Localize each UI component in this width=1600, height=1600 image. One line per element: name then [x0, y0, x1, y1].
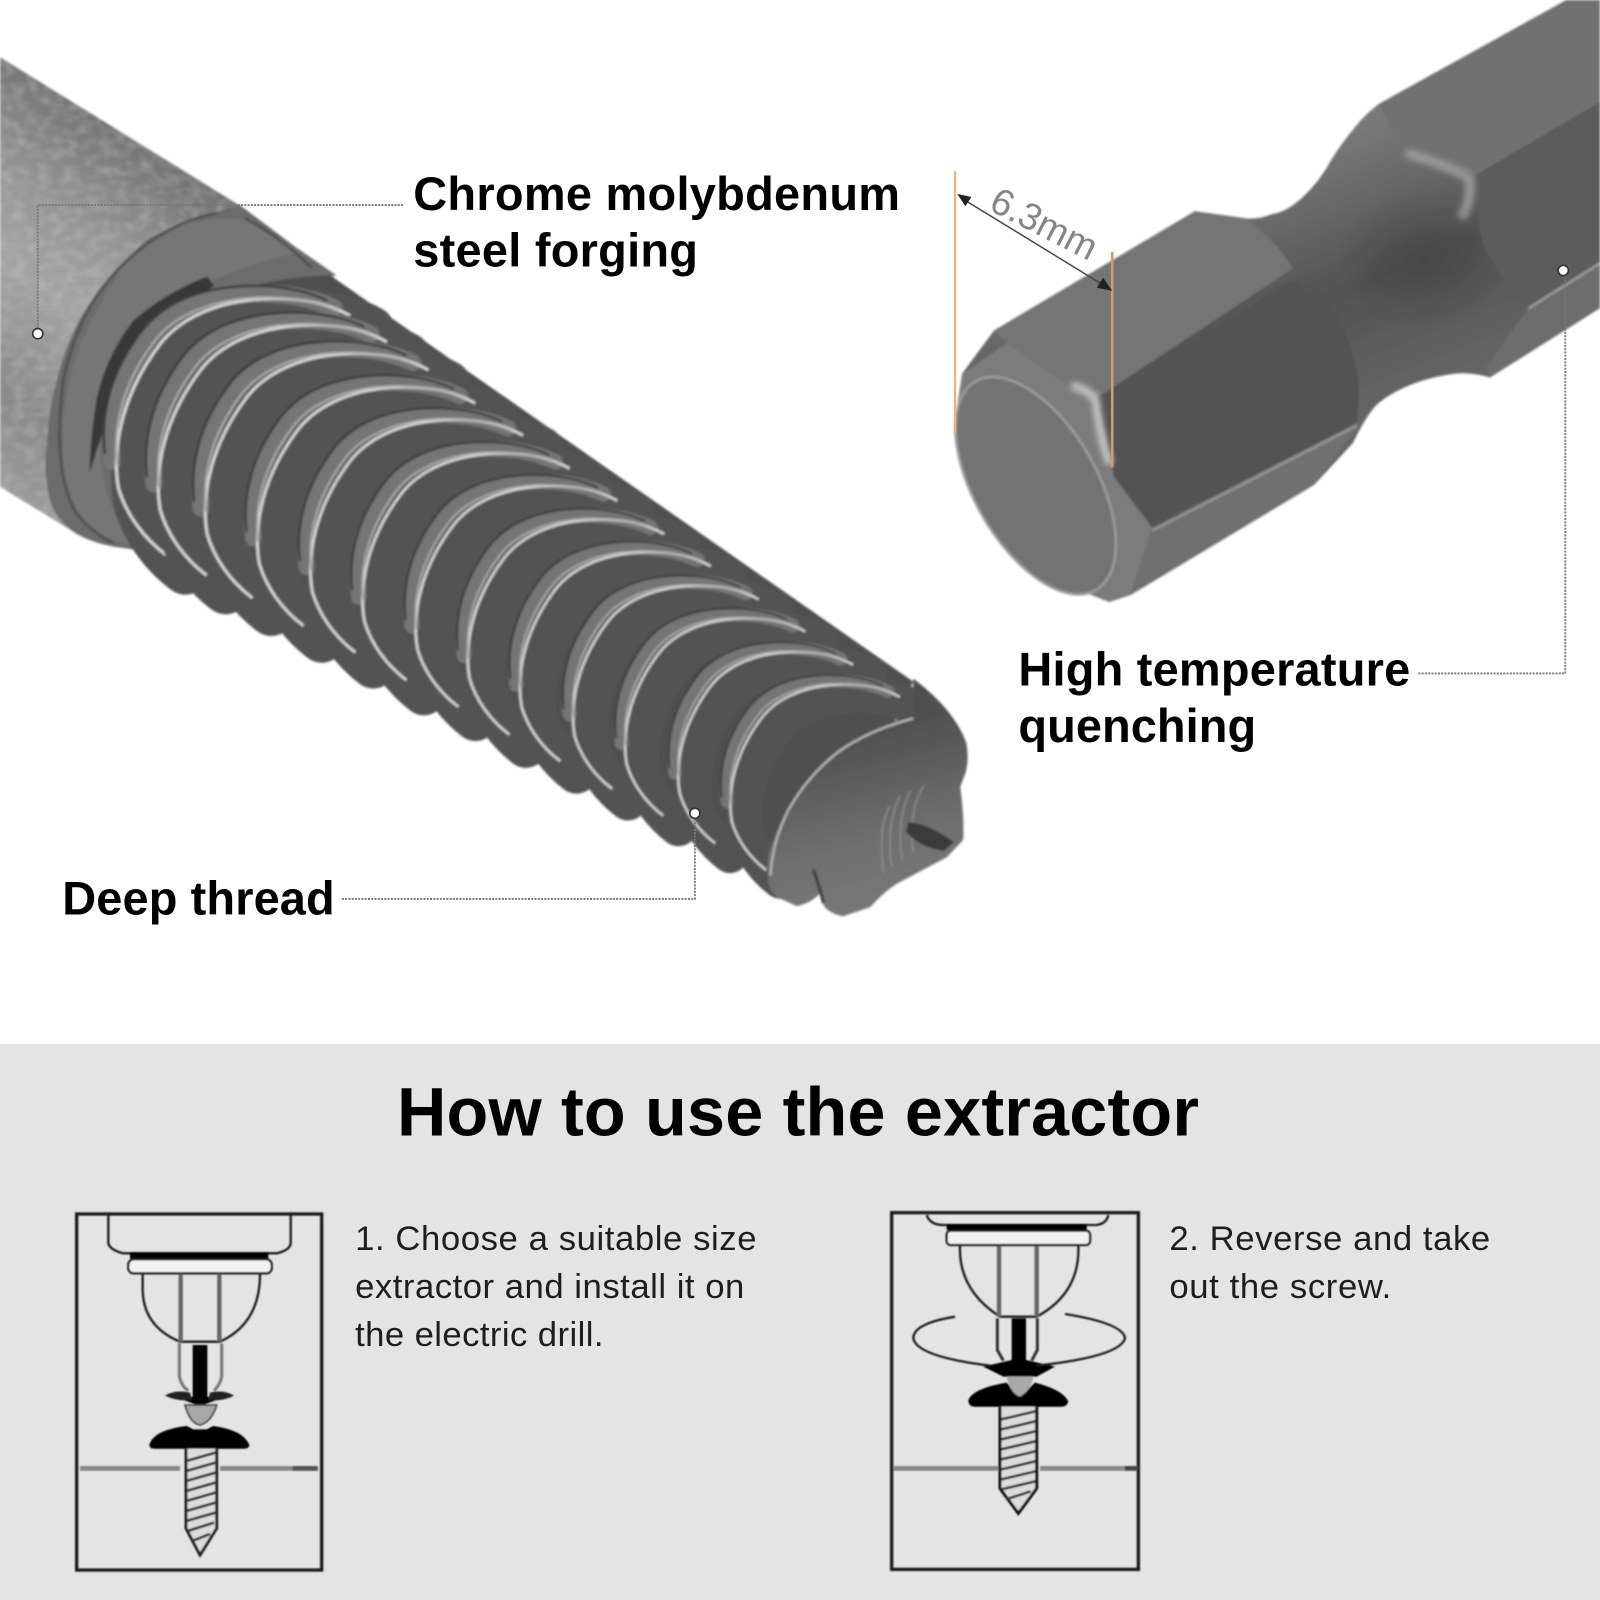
front hex side face: [1097, 281, 1359, 528]
text: step 1: extractor and install it on: [355, 1268, 745, 1306]
shank silhouette and neck: [956, 0, 1600, 602]
callout: chrome molybdenum: Chrome molybdenum: [413, 168, 900, 220]
rear hex top face: [1379, 0, 1600, 174]
callout: chrome molybdenum: [33, 168, 900, 339]
text: step 2: 2. Reverse and take: [1169, 1220, 1491, 1258]
text: step 1: the electric drill.: [355, 1316, 604, 1354]
callout: high temperature quenching: High temperature: [1018, 644, 1410, 696]
text: step 2: out the screw.: [1169, 1268, 1392, 1306]
callout: high temperature quenching: quenching: [1018, 700, 1256, 752]
rear hex side face: [1476, 102, 1600, 308]
thread turns: [42, 221, 914, 882]
threaded body base: [45, 205, 913, 888]
dimension: 6.3mm: [955, 171, 1112, 467]
neck shadow: [1337, 189, 1510, 332]
collar: [45, 205, 337, 551]
illustration: hex shank: [922, 0, 1600, 621]
text: step 1: [355, 1220, 757, 1354]
front hex lower face: [1109, 428, 1357, 602]
bit end chamfer: [956, 343, 1152, 602]
chamfer highlight: [1071, 386, 1110, 464]
callout: deep thread: [62, 808, 700, 924]
icon: step 2 drill with rotation: [892, 1213, 1138, 1569]
panel: how to use: [0, 1044, 1600, 1600]
callout: chrome molybdenum: steel forging: [413, 224, 698, 276]
illustration: threaded extractor bit: [0, 57, 968, 916]
neck highlight: [1406, 153, 1470, 218]
text: step 2: [1169, 1220, 1491, 1306]
text: step 1: 1. Choose a suitable size: [355, 1220, 757, 1258]
bit end face: [922, 351, 1149, 621]
steel shaft: [0, 57, 294, 547]
rear hex lower face: [1486, 263, 1600, 378]
heading: How to use the extractor: [397, 1075, 1199, 1151]
dimension: 6.3mm: 6.3mm: [984, 179, 1105, 268]
icon: step 1 drill: [77, 1214, 322, 1570]
collar slot: [90, 277, 214, 473]
front hex top face: [994, 211, 1293, 398]
callout: high temperature quenching: [1018, 265, 1568, 752]
tapered nose: [767, 679, 968, 916]
edge highlights: [1152, 426, 1357, 531]
rear hex edge highlight: [1529, 263, 1600, 308]
callout: deep thread: Deep thread: [62, 872, 335, 924]
